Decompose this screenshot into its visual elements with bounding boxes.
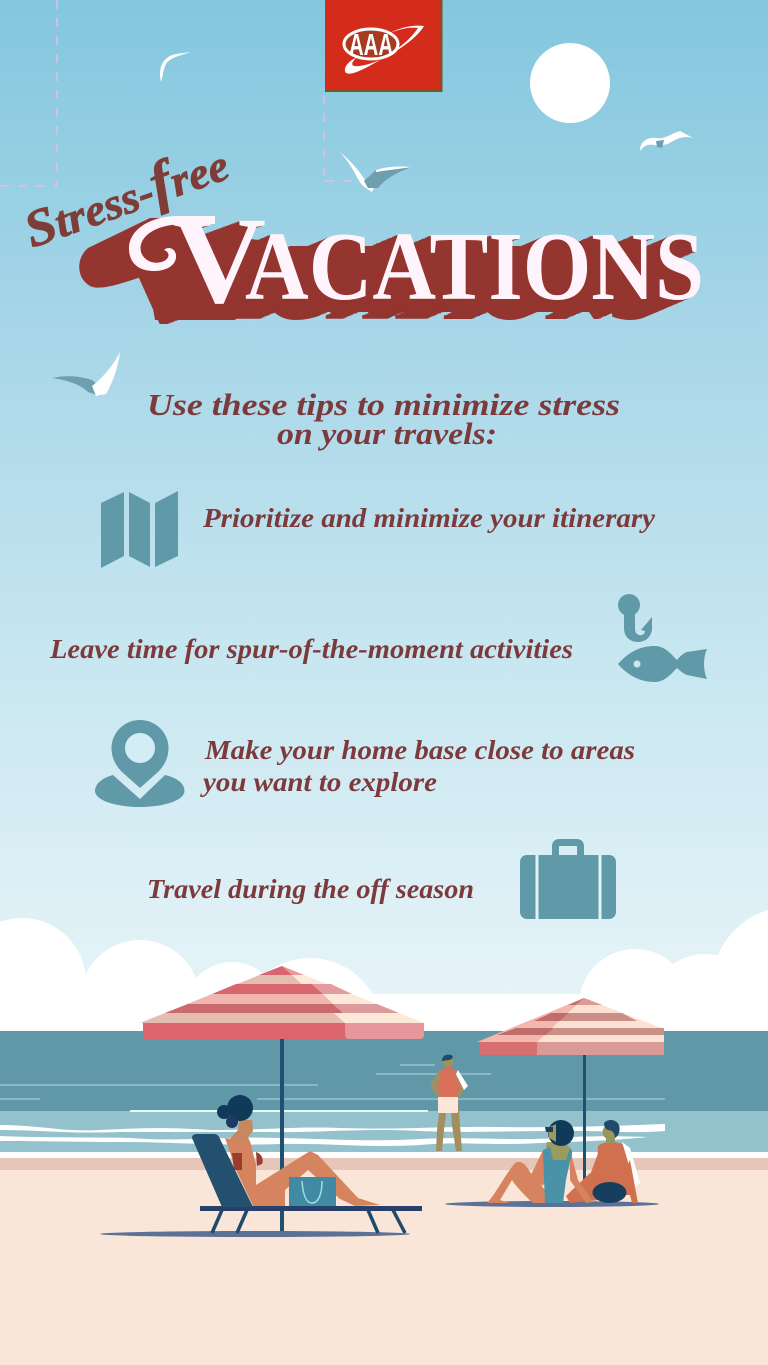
beach umbrella: right (477, 998, 664, 1203)
bird: centre (340, 152, 412, 192)
icon: map (101, 491, 178, 568)
tip 4: Travel during the off season (147, 874, 474, 904)
beach umbrella: left (140, 966, 424, 1233)
clouds (0, 907, 768, 1102)
sky background (0, 0, 768, 1040)
couple on the sand (445, 1120, 659, 1207)
intro heading (147, 387, 620, 451)
intro heading: Use these tips to minimize stress (147, 387, 620, 422)
tip 2: Leave time for spur-of-the-moment activities (49, 634, 573, 664)
logo: AAA (325, 0, 442, 92)
title: capital V with swash: V (172, 192, 266, 329)
standing man (430, 1055, 468, 1151)
title shadow backing (79, 218, 682, 320)
tip 3: Make your home base close to areas (204, 735, 635, 765)
intro heading: on your travels: (277, 416, 497, 451)
sea (0, 1031, 768, 1111)
subtitle: Stress-free: Stress-free (15, 128, 236, 260)
title: capital V with swash (128, 192, 266, 329)
tip 1: Prioritize and minimize your itinerary (202, 503, 656, 533)
icon: fish and hook (618, 594, 707, 682)
shallow water with waves (0, 1065, 768, 1152)
beach (0, 1152, 768, 1365)
icon: suitcase (520, 839, 616, 919)
bird: top right (640, 131, 693, 151)
tip 3: you want to explore (200, 767, 437, 797)
title: small capitals: ACATIONS (245, 213, 704, 321)
logo: AAA: AAA (349, 27, 393, 62)
icon: map pin (95, 720, 184, 807)
bird: left (52, 352, 120, 396)
woman on lounger (100, 1095, 422, 1237)
tip 3 (200, 735, 635, 797)
sun (530, 43, 610, 123)
bird: top left (160, 52, 191, 82)
